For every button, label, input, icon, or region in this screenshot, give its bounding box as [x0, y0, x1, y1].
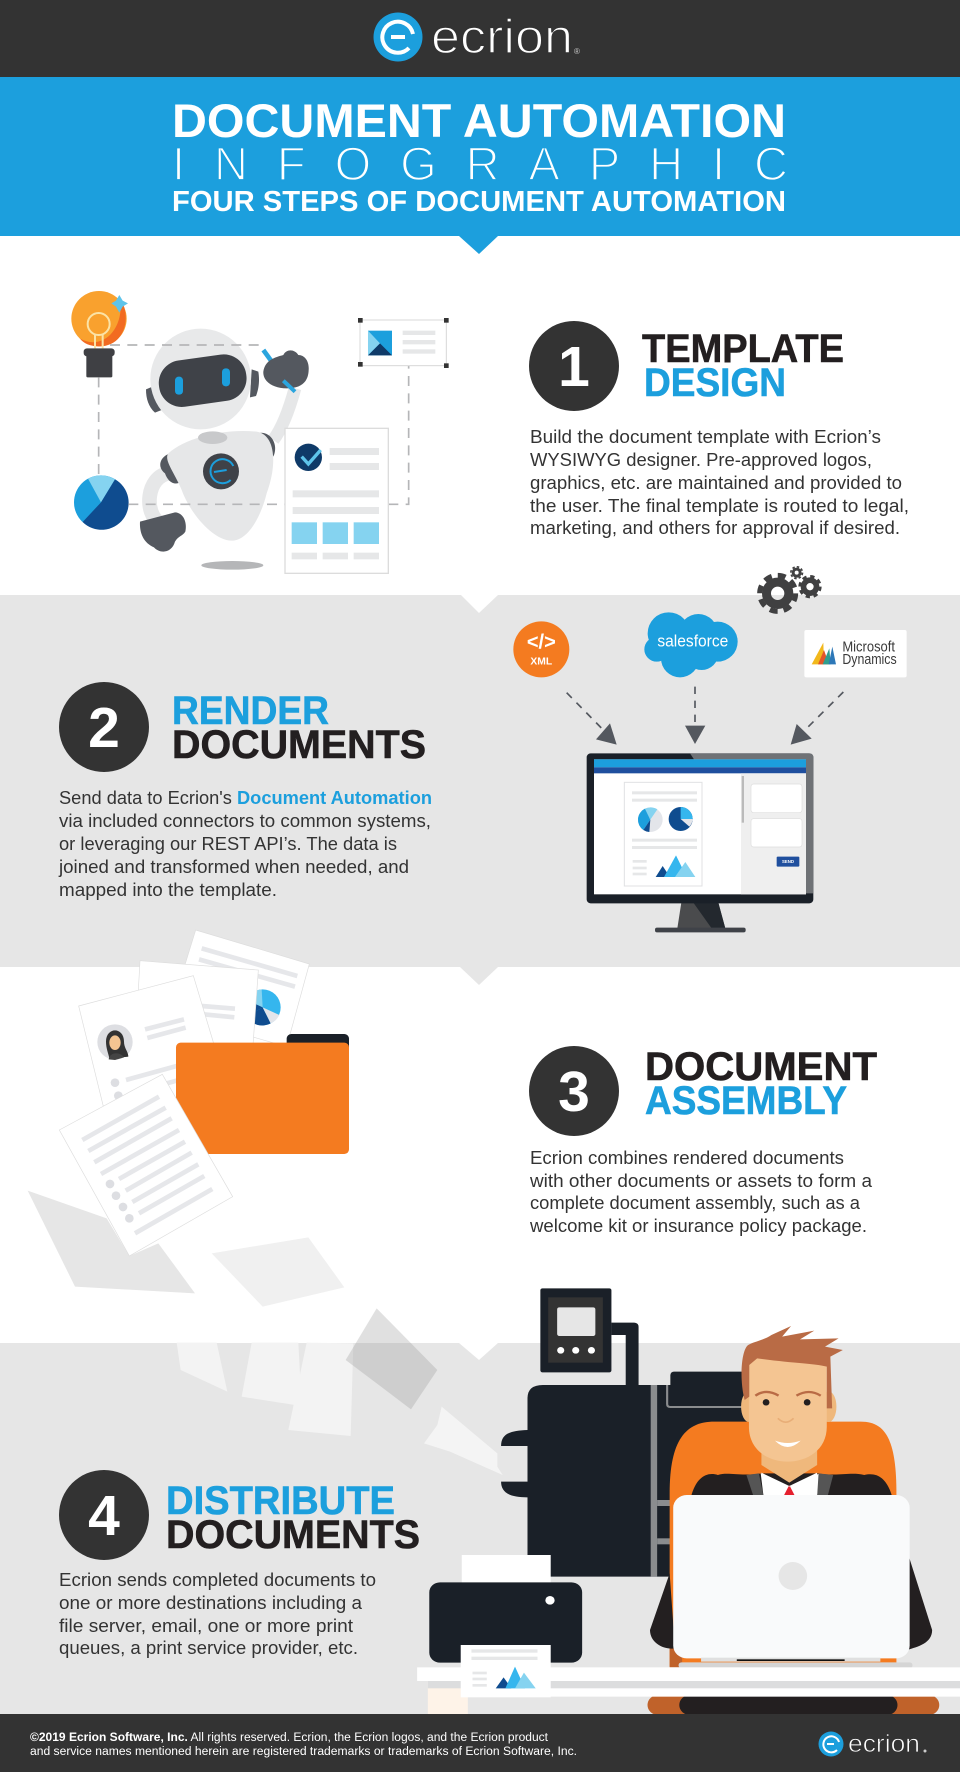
orange folder	[176, 1034, 349, 1154]
step 2 number badge	[59, 682, 149, 772]
middle paper	[135, 961, 258, 1050]
footer	[0, 1714, 960, 1772]
step 3 heading: DOCUMENT	[645, 1045, 877, 1089]
step 4 heading	[166, 1479, 420, 1557]
step 2 body text: mapped into the template.	[59, 879, 277, 900]
icon: XML badge: XML	[530, 657, 552, 668]
icon: salesforce cloud: salesforce	[657, 632, 728, 651]
robot figure	[140, 329, 309, 570]
step 2 heading: RENDER	[172, 689, 329, 733]
step 4 body text: queues, a print service provider, etc.	[59, 1637, 358, 1658]
flying papers	[177, 1308, 503, 1475]
step 1 heading: DESIGN	[644, 361, 786, 405]
icon: gears	[760, 567, 820, 611]
step 2 body text: via included connectors to common systems,	[59, 810, 431, 831]
icon: pie chart	[74, 475, 129, 530]
step 1 body text	[530, 426, 909, 538]
top logo bar: ecrion	[431, 11, 573, 64]
top logo bar: ®	[574, 47, 580, 56]
step 1 number badge: 1	[558, 335, 590, 399]
computer monitor: SEND	[782, 859, 794, 864]
illustration: worker with copier and printer	[417, 1288, 960, 1715]
step 4 heading: DISTRIBUTE	[166, 1479, 395, 1523]
icon: XML badge: </>	[527, 632, 556, 654]
step 2 number badge: 2	[88, 696, 120, 760]
step 4 number badge: 4	[88, 1484, 120, 1548]
footer logo	[818, 1730, 926, 1758]
office worker	[650, 1326, 932, 1667]
step 1 body text: Build the document template with Ecrion’s	[530, 426, 881, 447]
step 3 heading	[645, 1045, 877, 1123]
step 1 body text: graphics, etc. are maintained and provided to	[530, 472, 902, 493]
step 4 number badge	[59, 1470, 149, 1560]
step 2 body text	[58, 787, 432, 900]
step 3 body text: with other documents or assets to form a	[529, 1170, 873, 1191]
desk	[417, 1667, 960, 1715]
grey paper shadows	[28, 1191, 344, 1307]
icon: XML badge	[513, 621, 569, 677]
front paper with text lines	[59, 1074, 233, 1256]
step 2 body text: or leveraging our REST API’s. The data is	[59, 833, 397, 854]
step 3 body text: complete document assembly, such as a	[530, 1192, 861, 1213]
back paper with pie chart	[170, 930, 309, 1047]
printer	[429, 1555, 582, 1697]
step 3 number badge	[529, 1046, 619, 1136]
document card	[285, 428, 388, 573]
step 4 heading: DOCUMENTS	[166, 1513, 420, 1557]
step 4 body text	[59, 1569, 376, 1658]
icon: light bulb	[71, 291, 128, 377]
footer copyright text	[30, 1732, 577, 1758]
profile paper	[79, 976, 227, 1120]
step 1 number badge	[529, 321, 619, 411]
footer copyright text: ©2019 Ecrion Software, Inc. All rights reserved. Ecrion, the Ecrion logos, and the Ecrion product	[30, 1732, 549, 1744]
step 1 body text: the user. The final template is routed to legal,	[530, 495, 909, 516]
footer logo: ecrion	[848, 1730, 920, 1758]
title banner: FOUR STEPS OF DOCUMENT AUTOMATION	[172, 186, 786, 218]
icon: Microsoft Dynamics logo	[804, 630, 907, 677]
step 2 heading	[172, 689, 426, 767]
illustration: data sources and monitor	[513, 567, 907, 932]
step 4 body text: one or more destinations including a	[59, 1592, 363, 1613]
icon: Microsoft Dynamics logo: Dynamics	[842, 651, 897, 668]
step 2 body text: joined and transformed when needed, and	[58, 856, 409, 877]
step 3 body text: Ecrion combines rendered documents	[530, 1147, 844, 1168]
illustration: documents and folder	[28, 930, 349, 1307]
arrow: XML to monitor	[567, 693, 617, 745]
footer copyright text: and service names mentioned herein are registered trademarks or trademarks of Ecrion Software, Inc.	[30, 1746, 577, 1758]
step 3 heading: ASSEMBLY	[645, 1079, 847, 1123]
top logo bar	[0, 0, 960, 77]
computer monitor	[587, 753, 813, 932]
step 3 number badge: 3	[558, 1060, 590, 1124]
step 3 body text	[529, 1147, 873, 1236]
step 1 heading	[642, 327, 844, 405]
title banner: INFOGRAPHIC	[172, 137, 788, 190]
laptop	[673, 1495, 912, 1668]
step 2 body text: Send data to Ecrion's Document Automation	[59, 787, 432, 808]
step 1 body text: WYSIWYG designer. Pre-approved logos,	[530, 449, 872, 470]
step 4 body text: Ecrion sends completed documents to	[59, 1569, 376, 1590]
illustration: robot designer	[71, 291, 449, 573]
arrow: dynamics to monitor	[791, 692, 843, 745]
step 4 body text: file server, email, one or more print	[59, 1615, 353, 1636]
icon: Microsoft Dynamics logo: Microsoft	[842, 639, 896, 656]
title banner	[0, 77, 960, 254]
icon: salesforce cloud	[644, 612, 738, 677]
step 3 body text: welcome kit or insurance policy package.	[529, 1215, 867, 1236]
image frame	[358, 318, 449, 368]
step 2 heading: DOCUMENTS	[172, 723, 426, 767]
copier machine	[501, 1288, 754, 1577]
dashed connector lines	[99, 345, 409, 504]
title banner: DOCUMENT AUTOMATION	[172, 94, 786, 147]
arrow: salesforce to monitor	[685, 687, 705, 744]
step 1 heading: TEMPLATE	[642, 327, 844, 371]
step 1 body text: marketing, and others for approval if desired.	[530, 517, 900, 538]
